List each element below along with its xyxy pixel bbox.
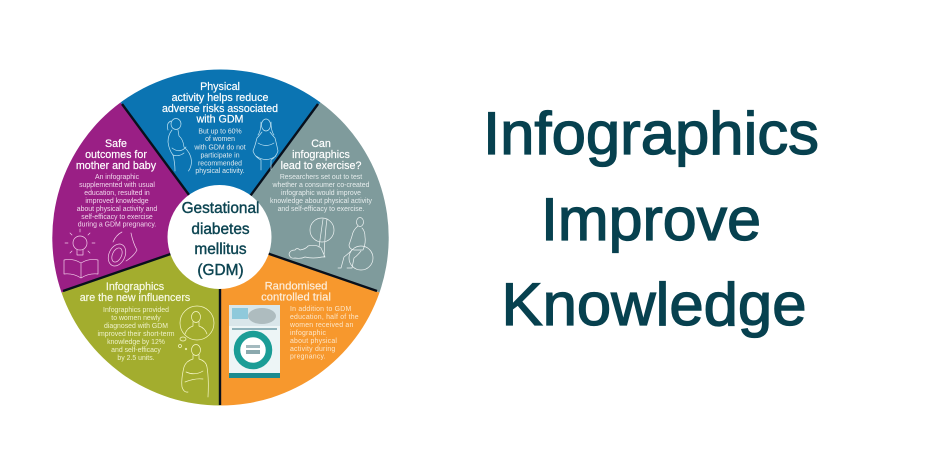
icon: pregnant woman front view <box>253 119 278 170</box>
icon: foetus in womb <box>105 232 137 269</box>
orange body text: activity during <box>290 346 335 353</box>
icon: woman sitting on ball <box>338 218 373 270</box>
grey body text: Researchers set out to test <box>280 174 362 181</box>
blue body text: physical activity. <box>195 168 245 175</box>
green body text: improved their short-term <box>98 331 175 338</box>
icon: thought bubble with woman <box>178 306 214 350</box>
infographic thumbnail <box>229 305 280 378</box>
grey heading: Can <box>311 138 331 150</box>
magenta heading: outcomes for <box>85 149 147 161</box>
green heading: Infographics <box>106 281 164 293</box>
orange body text: pregnancy. <box>290 354 326 360</box>
title: Infographics <box>483 100 819 167</box>
orange body text: women received an <box>289 322 354 329</box>
icon: pregnant woman side view <box>167 118 192 171</box>
magenta body text: supplemented with usual <box>79 182 155 189</box>
green body text: by 2.5 units. <box>117 355 155 362</box>
blue body text: with GDM do not <box>193 144 246 152</box>
orange body text: In addition to GDM <box>290 306 351 313</box>
segment: grey can infographics <box>220 102 389 292</box>
panel: wheel <box>52 69 389 406</box>
blue body text: of women <box>205 136 235 143</box>
magenta body text: improved knowledge <box>85 198 149 205</box>
blue body text: participate in <box>200 152 240 160</box>
title <box>483 100 819 338</box>
segment: blue physical activity <box>120 69 320 237</box>
blue heading: adverse risks associated <box>162 103 278 115</box>
magenta body text: during a GDM pregnancy. <box>78 222 156 228</box>
blue heading: activity helps reduce <box>172 92 268 104</box>
grey heading: lead to exercise? <box>281 160 361 172</box>
grey body text: infographic would improve <box>281 190 361 197</box>
title: Improve <box>541 186 761 253</box>
segment: green influencers <box>62 238 220 406</box>
magenta body text: self-efficacy to exercise <box>81 214 153 221</box>
grey heading: infographics <box>292 149 350 161</box>
blue body text: recommended <box>198 160 242 168</box>
spokes <box>63 104 377 405</box>
segment: orange randomised trial <box>220 238 380 406</box>
centre label: (GDM) <box>197 262 244 279</box>
magenta body text: education, resulted in <box>84 190 150 197</box>
segment: magenta safe outcomes <box>52 102 220 292</box>
centre circle <box>168 185 272 289</box>
magenta body text: about physical activity and <box>77 206 157 213</box>
green body text: and self-efficacy <box>111 347 161 354</box>
magenta heading: Safe <box>105 138 127 150</box>
icon: lightbulb over open book <box>64 229 98 278</box>
green body text: diagnosed with GDM <box>104 323 168 330</box>
green heading: are the new influencers <box>80 292 190 304</box>
grey body text: and self-efficacy to exercise. <box>278 206 364 213</box>
magenta body text: An infographic <box>95 174 140 181</box>
green body text: to women newly <box>111 315 161 322</box>
icon: woman stretching with ball <box>289 218 334 258</box>
orange body text: infographic <box>290 330 326 337</box>
grey body text: knowledge about physical activity <box>270 198 372 205</box>
title: Knowledge <box>502 271 806 338</box>
blue body text: But up to 60% <box>198 128 242 136</box>
icon: pregnant woman holding belly <box>182 344 208 397</box>
orange heading: controlled trial <box>261 292 331 304</box>
grey body text: whether a consumer co-created <box>272 182 370 189</box>
centre label: Gestational <box>182 200 259 217</box>
green body text: knowledge by 12% <box>107 339 165 346</box>
blue heading: Physical <box>200 81 240 93</box>
centre label: diabetes <box>191 221 250 238</box>
orange body text: about physical <box>290 338 337 345</box>
orange heading: Randomised <box>265 280 327 292</box>
green body text: Infographics provided <box>103 307 169 314</box>
blue heading: with GDM <box>196 114 244 126</box>
orange body text: education, half of the <box>290 314 359 321</box>
centre label: mellitus <box>194 241 247 258</box>
magenta heading: mother and baby <box>76 160 157 172</box>
